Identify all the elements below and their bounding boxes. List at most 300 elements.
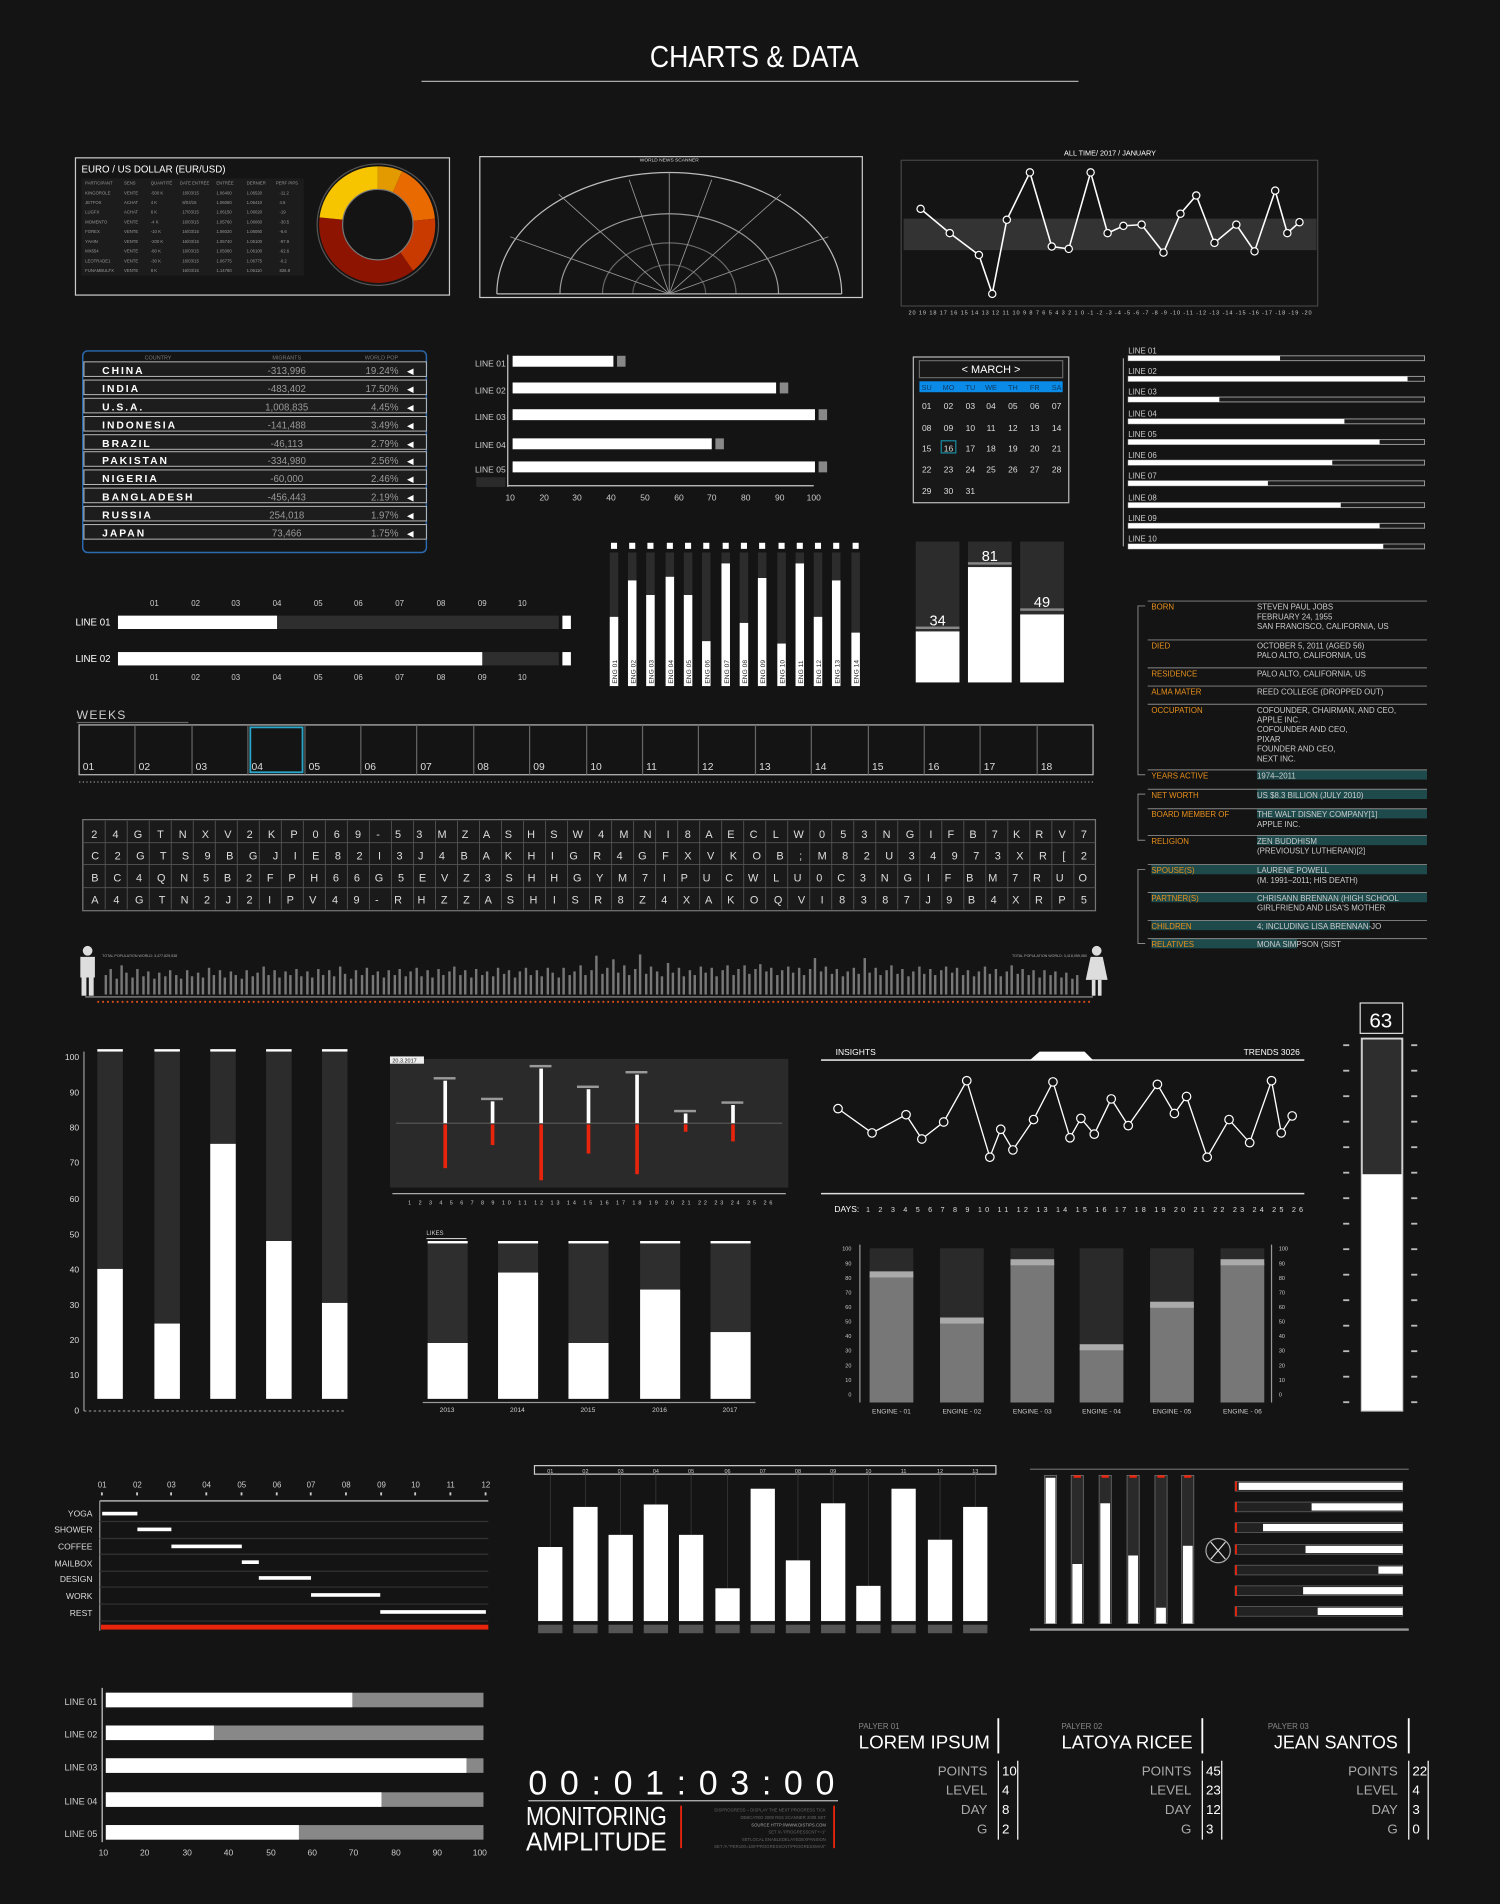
chart: engine bars: 60 [845, 1305, 851, 1311]
panel: player 03: 4 [1412, 1783, 1420, 1798]
panel: biography: BORN [1151, 603, 1174, 612]
chart: engine bars: 50 [1279, 1320, 1285, 1326]
icon: X circle [1206, 1538, 1230, 1563]
chart: line 01-10 progress bars: LINE 04 [1128, 409, 1157, 418]
panel: biography: OCCUPATION [1151, 706, 1203, 715]
chart: positive/negative bars: 20.3.2017 [392, 1058, 417, 1064]
panel: player 03: 0 [1412, 1822, 1420, 1837]
panel: weeks: 09 [533, 762, 545, 773]
chart: line 01-10 progress bars: LINE 06 [1128, 451, 1157, 460]
chart: engine bars: ENGINE - 04 [1082, 1408, 1121, 1415]
chart: engine bars: ENGINE - 06 [1223, 1408, 1262, 1415]
chart: donut [317, 164, 439, 285]
panel: weeks: 02 [139, 762, 150, 773]
panel: biography: OCTOBER 5, 2011 (AGED 56) [1257, 641, 1365, 650]
timer: monitoring amplitude [526, 1765, 838, 1857]
panel: weeks: 12 [702, 762, 714, 773]
chart: daily schedule gantt: 02 [133, 1481, 142, 1490]
calendar: 30 [944, 486, 954, 496]
panel: country migrants table: -483,402 [268, 384, 306, 395]
chart: engine bars: 50 [845, 1320, 851, 1326]
chart: daily schedule gantt [54, 1481, 490, 1631]
chart: engine bars: 100 [842, 1247, 851, 1253]
chart: line 01/02 long bars: 10 [518, 599, 527, 608]
panel: biography: APPLE INC. [1257, 715, 1300, 724]
panel: character grid: B C 4 Q N 5 B 2 F P H 6 6 G 5 E V Z 3 S H H G Y M 7 I P U C W L U 0 C 3 N G I F B M 7 R U O [91, 873, 1087, 885]
panel: weeks: 15 [872, 762, 884, 773]
chart: line 01/02 long bars: 05 [314, 599, 323, 608]
calendar: 05 [1008, 401, 1018, 411]
chart: engine bars: 10 [1279, 1378, 1285, 1384]
calendar: FR [1030, 383, 1040, 392]
chart: daily schedule gantt: REST [70, 1608, 92, 1618]
chart: daily schedule gantt: 05 [237, 1481, 247, 1490]
table: trades: 1.06400 [216, 190, 232, 195]
chart: line 01/02 long bars: 01 [150, 673, 159, 682]
chart: ENG vertical bars: ENG 03 [648, 660, 655, 684]
timer: monitoring amplitude: SET /A "PROGRESSCNT+=1" [768, 1830, 826, 1835]
panel: biography: PIXAR [1257, 735, 1281, 744]
chart: insights line [821, 1047, 1304, 1214]
chart: big vertical bars: 90 [70, 1087, 79, 1097]
panel: weeks [77, 708, 1093, 782]
panel: country migrants table: NIGERIA [102, 474, 159, 485]
panel: biography: ZEN BUDDHISM [1257, 837, 1317, 846]
panel: country migrants table: RUSSIA [102, 511, 153, 522]
chart: engine bars: ENGINE - 03 [1013, 1408, 1052, 1415]
chart: 34 81 49 bars [916, 542, 1064, 682]
chart: positive/negative bars: 1 2 3 4 5 6 7 8 9 10 11 12 13 14 15 16 17 18 19 20 21 22 23 24 25 26 [408, 1201, 772, 1207]
chart: line 01/02 long bars: LINE 02 [75, 654, 111, 665]
calendar: WE [985, 383, 997, 392]
panel: weeks: 01 [83, 762, 94, 773]
table: trades: MX654 [85, 249, 99, 254]
chart: line 01-10 progress bars: LINE 02 [1128, 367, 1157, 376]
calendar: 03 [966, 401, 975, 411]
panel: weeks: 17 [984, 762, 995, 773]
chart: line 01-05 horizontal bars: LINE 05 [475, 464, 506, 474]
chart: insights line: TRENDS 3026 [1244, 1047, 1300, 1057]
timer: monitoring amplitude: MONITORING [526, 1803, 667, 1831]
panel: player 03: DAY [1371, 1802, 1398, 1817]
panel: country migrants table: ◀ [407, 421, 414, 431]
chart: big vertical bars: 50 [70, 1229, 79, 1239]
chart: big vertical bars: 40 [70, 1265, 79, 1275]
calendar: 11 [987, 423, 996, 433]
chart: 13 vertical bars: 05 [688, 1469, 694, 1475]
chart: likes yearly bars: 2014 [510, 1407, 525, 1414]
chart: big vertical bars: 0 [74, 1405, 79, 1415]
chart: line 01/02 long bars: 06 [354, 673, 363, 682]
chart: 13 vertical bars [534, 1466, 996, 1633]
table: trades: 4 K [151, 200, 157, 205]
table: trades: KINGOROLE [85, 190, 111, 195]
table: trades: 1.05740 [216, 239, 232, 244]
table: trades: -62.6 [279, 249, 290, 254]
table: trades: 1.06020 [247, 210, 263, 215]
panel: player 01: 8 [1002, 1802, 1009, 1817]
chart: line 01-05 horizontal bars: LINE 03 [475, 412, 506, 422]
panel: country migrants table: BANGLADESH [102, 492, 194, 503]
chart: big vertical bars: 80 [70, 1123, 79, 1133]
chart: line 01/02 long bars [75, 599, 571, 682]
panel: biography: PALO ALTO, CALIFORNIA, US [1257, 669, 1366, 678]
table: trades: -200 K [151, 239, 163, 244]
chart: ENG vertical bars: ENG 11 [798, 660, 805, 684]
table: trades: -11.2 [279, 190, 289, 195]
table: trades: SENS [124, 181, 136, 186]
chart: big vertical bars: 70 [70, 1158, 79, 1168]
panel: player 02: LEVEL [1150, 1783, 1191, 1798]
chart: line 01/02 long bars: 09 [478, 599, 487, 608]
chart: big vertical bars: 20 [70, 1335, 79, 1345]
chart: likes yearly bars [423, 1231, 755, 1414]
panel: player 03: POINTS [1348, 1763, 1398, 1778]
chart: engine bars: 80 [1279, 1276, 1285, 1282]
panel: country migrants table: 73,466 [272, 529, 302, 540]
chart: engine bars: 30 [1279, 1349, 1285, 1355]
chart: engine bars: ENGINE - 02 [942, 1408, 982, 1415]
table: trades: 1.14780 [216, 268, 232, 273]
table: trades: ENTRÉE [216, 181, 234, 186]
chart: engine bars: 0 [1279, 1392, 1282, 1398]
panel: biography: 1974–2011 [1257, 771, 1296, 780]
chart: line 01-05 bottom bars: 10 [99, 1847, 108, 1857]
table: trades: DATE ENTRÉE [180, 181, 209, 186]
chart: line 01/02 long bars: 02 [191, 599, 200, 608]
table: trades: 17/03/15 [182, 210, 200, 215]
panel: biography: SAN FRANCISCO, CALIFORNIA, US [1257, 622, 1389, 631]
calendar: 25 [986, 464, 996, 474]
chart: ENG vertical bars: ENG 13 [834, 660, 841, 684]
panel: player 02: 23 [1206, 1783, 1221, 1798]
panel: player 01: 4 [1002, 1783, 1010, 1798]
panel: weeks: 16 [928, 762, 940, 773]
chart: daily schedule gantt: 10 [411, 1481, 420, 1490]
panel: country migrants table: 3.49% [371, 421, 399, 432]
panel: player 01: 2 [1002, 1822, 1009, 1837]
panel: weeks: 07 [420, 762, 432, 773]
calendar: TH [1008, 383, 1018, 392]
chart: line 01-05 bottom bars: LINE 05 [64, 1829, 97, 1839]
chart: line 01-05 bottom bars: 100 [473, 1847, 487, 1857]
chart: line 01/02 long bars: LINE 01 [75, 617, 111, 628]
chart: ENG vertical bars: ENG 10 [780, 660, 787, 684]
panel: country migrants table: 2.19% [371, 492, 399, 503]
panel: biography: LAURENE POWELL [1257, 866, 1330, 875]
table: trades: ACHAT [124, 200, 139, 205]
chart: engine bars: 30 [845, 1349, 851, 1355]
panel: country migrants table: ◀ [407, 402, 414, 412]
panel: weeks: 10 [590, 762, 602, 773]
panel: player 02: 12 [1206, 1802, 1221, 1817]
chart: 13 vertical bars: 10 [865, 1469, 871, 1475]
table: trades: 16/03/15 [182, 229, 200, 234]
panel: biography: RELIGION [1151, 837, 1189, 846]
panel: biography: YEARS ACTIVE [1151, 771, 1208, 780]
table: trades: YAHIN [85, 239, 98, 244]
table: trades: 1.06100 [247, 249, 263, 254]
chart: line 01/02 long bars: 10 [518, 673, 527, 682]
calendar: SU [922, 383, 932, 392]
chart: line 01-05 horizontal bars: LINE 01 [475, 359, 506, 369]
chart: engine bars: 20 [1279, 1363, 1285, 1369]
chart: line 01/02 long bars: 05 [314, 673, 323, 682]
table: trades: -500 K [151, 190, 163, 195]
chart: ENG vertical bars: ENG 02 [630, 660, 637, 684]
table: trades: 1.05080 [216, 249, 232, 254]
chart: 34 81 49 bars: 34 [930, 613, 946, 629]
chart: line 01-05 bottom bars: LINE 03 [64, 1762, 97, 1772]
table: trades: PARTICIPANT [85, 181, 113, 186]
panel: biography: SPOUSE(S) [1151, 866, 1195, 875]
panel: player 03 [1268, 1718, 1428, 1840]
chart: daily schedule gantt: 01 [98, 1481, 107, 1490]
chart: line 01-05 bottom bars: LINE 04 [64, 1796, 97, 1806]
panel: country migrants table: -60,000 [270, 474, 304, 485]
panel: country migrants table: JAPAN [102, 529, 146, 540]
panel: country migrants table: WORLD POP [365, 355, 398, 361]
table: trades: 8/03/15 [182, 200, 197, 205]
calendar: 09 [944, 423, 954, 433]
table: trades: VENTE [124, 268, 138, 273]
calendar: 14 [1052, 423, 1062, 433]
chart: engine bars: 20 [845, 1363, 851, 1369]
chart: daily schedule gantt: 08 [342, 1481, 351, 1490]
chart: line 01/02 long bars: 09 [478, 673, 487, 682]
table: trades: FUNAMBULFX [85, 268, 114, 273]
chart: daily schedule gantt: 04 [202, 1481, 212, 1490]
calendar: 13 [1030, 423, 1040, 433]
chart: line 01-10 progress bars: LINE 08 [1128, 493, 1157, 502]
panel: country migrants table: ◀ [407, 456, 414, 466]
chart: line 01/02 long bars: 01 [150, 599, 159, 608]
table: trades: -10 K [151, 229, 161, 234]
chart: line 01-10 progress bars: LINE 05 [1128, 430, 1157, 439]
panel: weeks: 05 [309, 762, 320, 773]
chart: ENG vertical bars: ENG 08 [742, 660, 749, 684]
panel: biography: US $8.3 BILLION (JULY 2010) [1257, 791, 1364, 800]
chart: likes yearly bars: 2013 [440, 1407, 455, 1414]
chart: ENG vertical bars: ENG 14 [854, 660, 861, 684]
chart: ENG vertical bars: ENG 12 [816, 660, 823, 684]
panel: biography: RELATIVES [1151, 940, 1194, 949]
panel: player 01: LOREM IPSUM [859, 1733, 990, 1753]
chart: line 01-05 horizontal bars [475, 355, 827, 502]
panel: biography: REED COLLEGE (DROPPED OUT) [1257, 688, 1384, 697]
panel: country migrants table: 2.46% [371, 474, 399, 485]
chart: engine bars: 90 [845, 1261, 851, 1267]
panel: country migrants table: -456,443 [268, 492, 306, 503]
chart: 13 vertical bars: 12 [937, 1469, 943, 1475]
chart: engine bars: 80 [845, 1276, 851, 1282]
table: trades: 16/03/15 [182, 258, 200, 263]
chart: line 01-05 bottom bars [64, 1688, 487, 1857]
table: trades: 1.06060 [247, 219, 263, 224]
table: trades: MOMENTO [85, 219, 108, 224]
panel: world news scanner [480, 157, 862, 298]
table: trades: VENTE [124, 258, 138, 263]
chart: line 01-05 horizontal bars: 90 [775, 492, 785, 502]
chart: all time line chart [901, 148, 1318, 316]
chart: line 01-05 horizontal bars: 20 [539, 492, 549, 502]
panel: biography: FOUNDER AND CEO, [1257, 745, 1336, 754]
chart: engine bars [842, 1245, 1288, 1415]
panel: player 01: PALYER 01 [859, 1722, 900, 1731]
chart: ENG vertical bars: ENG 06 [704, 660, 711, 684]
panel: weeks: 18 [1041, 762, 1053, 773]
chart: line 01-10 progress bars: LINE 10 [1128, 535, 1157, 544]
chart: line 01-05 horizontal bars: 10 [505, 492, 515, 502]
panel: player 02: G [1181, 1822, 1191, 1837]
panel: country migrants table: 1,008,835 [265, 402, 308, 413]
calendar: 06 [1030, 401, 1040, 411]
table: trades: DERNIER [247, 181, 266, 186]
table: trades: 1.05760 [216, 219, 232, 224]
calendar: 26 [1008, 464, 1018, 474]
panel: country migrants table: ◀ [407, 529, 414, 539]
chart: ENG vertical bars [610, 543, 861, 686]
chart: engine bars: 70 [1279, 1290, 1285, 1296]
chart: ENG vertical bars: ENG 05 [686, 660, 693, 684]
chart: daily schedule gantt: 03 [167, 1481, 176, 1490]
chart: line 01/02 long bars: 07 [395, 599, 404, 608]
calendar: 20 [1030, 444, 1040, 454]
chart: line 01-10 progress bars: LINE 07 [1128, 471, 1157, 480]
panel: player 02: 45 [1206, 1763, 1221, 1778]
chart: line 01/02 long bars: 08 [437, 599, 446, 608]
table: trades: 1.06100 [247, 239, 263, 244]
chart: line 01-05 horizontal bars: 70 [707, 492, 717, 502]
chart: 13 vertical bars: 09 [830, 1469, 836, 1475]
chart: line 01/02 long bars: 06 [354, 599, 363, 608]
table: trades: QUANTITÉ [151, 181, 172, 186]
panel: country migrants table: 2.56% [371, 456, 399, 467]
table: trades: -19 [279, 210, 286, 215]
panel: country migrants table: PAKISTAN [102, 456, 169, 467]
chart: insights line: INSIGHTS [836, 1047, 876, 1057]
chart: line 01-05 horizontal bars: 40 [606, 492, 616, 502]
chart: engine bars: 60 [1279, 1305, 1285, 1311]
panel: player 02 [1061, 1718, 1222, 1840]
panel: country migrants table: -46,113 [271, 439, 303, 450]
calendar: 16 [944, 444, 954, 454]
calendar: 21 [1052, 444, 1062, 454]
calendar: 02 [944, 401, 954, 411]
chart: line 01/02 long bars: 02 [191, 673, 200, 682]
panel: player 03: 3 [1412, 1802, 1420, 1817]
chart: line 01/02 long bars: 07 [395, 673, 404, 682]
panel: biography: CHILDREN [1151, 922, 1192, 931]
chart: likes yearly bars: 2016 [652, 1407, 667, 1414]
table: trades: FOREX [85, 229, 100, 234]
chart: big vertical bars: 10 [70, 1370, 79, 1380]
timer: monitoring amplitude: DEBCATED 2008 RSS SCANNER 2008 SET [740, 1815, 826, 1820]
panel: country migrants table: 1.97% [371, 511, 399, 522]
chart: line 01-05 horizontal bars: LINE 04 [475, 440, 506, 450]
chart: line 01-05 horizontal bars: 60 [674, 492, 684, 502]
table: trades [82, 178, 304, 276]
panel: biography: (M. 1991–2011; HIS DEATH) [1257, 876, 1358, 885]
panel: biography: STEVEN PAUL JOBS [1257, 603, 1333, 612]
table: trades: 16/03/15 [182, 268, 200, 273]
panel: country migrants table: 2.79% [371, 439, 399, 450]
table: trades: -30 K [151, 258, 161, 263]
calendar: 22 [922, 464, 932, 474]
chart: likes yearly bars: 2015 [580, 1407, 596, 1414]
calendar: 27 [1030, 464, 1040, 474]
calendar: 29 [922, 486, 932, 496]
panel: player 01: DAY [961, 1802, 987, 1817]
table: trades: ACHAT [124, 210, 139, 215]
panel: character grid: A 4 G T N 2 J 2 I P V 4 9 - R H Z Z A S H I S R 8 Z 4 X A K O Q V I 8 3 8 7 J 9 B 4 X R P 5 [91, 894, 1087, 906]
panel: biography: APPLE INC. [1257, 820, 1300, 829]
icon: woman [1086, 946, 1108, 996]
chart: line 01-05 bottom bars: 60 [308, 1847, 317, 1857]
table: trades: -0.2 [279, 258, 287, 263]
panel: biography: THE WALT DISNEY COMPANY[1] [1257, 810, 1377, 819]
chart: 13 vertical bars: 07 [760, 1469, 766, 1475]
calendar: 08 [922, 423, 932, 433]
table: trades: 16/03/15 [182, 239, 200, 244]
calendar [913, 357, 1069, 503]
calendar: 19 [1008, 444, 1018, 454]
chart: engine bars: 100 [1279, 1247, 1288, 1253]
chart: line 01/02 long bars: 08 [437, 673, 446, 682]
table: trades: 1.06520 [247, 190, 263, 195]
chart: line 01/02 long bars: 03 [231, 599, 241, 608]
table: trades: -30.5 [279, 219, 290, 224]
chart: ENG vertical bars: ENG 07 [724, 660, 731, 684]
panel: player 01: G [977, 1822, 987, 1837]
chart: 34 81 49 bars: 81 [982, 549, 998, 565]
panel: country migrants table: CHINA [102, 366, 145, 377]
panel: biography: ALMA MATER [1151, 688, 1202, 697]
panel: country migrants table: ◀ [407, 492, 414, 502]
panel: player 02: PALYER 02 [1061, 1722, 1102, 1731]
panel: weeks: 13 [759, 762, 771, 773]
panel: country migrants table: 17.50% [366, 384, 399, 395]
table: trades: VENTE [124, 190, 138, 195]
panel: weeks: WEEKS [77, 708, 127, 722]
chart: 13 vertical bars: 11 [901, 1469, 906, 1475]
calendar: < MARCH > [962, 364, 1020, 376]
panel: biography: PALO ALTO, CALIFORNIA, US [1257, 651, 1366, 660]
chart: big vertical bars [65, 1049, 347, 1415]
panel: biography: RESIDENCE [1151, 669, 1197, 678]
panel: player 02: DAY [1165, 1802, 1191, 1817]
table: trades: 16/03/15 [182, 190, 200, 195]
chart: insights line: DAYS: [834, 1204, 859, 1214]
icon: man [80, 946, 95, 996]
panel: euro us dollar [75, 158, 449, 295]
chart: daily schedule gantt: 12 [482, 1481, 490, 1490]
chart: daily schedule gantt: COFFEE [58, 1541, 93, 1551]
chart: world population skyline [80, 946, 1108, 1002]
chart: 34 81 49 bars: 49 [1034, 595, 1050, 611]
chart: engine bars: ENGINE - 05 [1153, 1408, 1192, 1415]
chart: ENG vertical bars: ENG 04 [668, 660, 675, 684]
chart: world population skyline: TOTAL POPULATION WORLD: 3,418,059,080 [1012, 954, 1087, 958]
panel: country migrants table: 1.75% [371, 529, 399, 540]
chart: all time line chart: ALL TIME/ 2017 / JANUARY [1064, 148, 1156, 157]
chart: ENG vertical bars: ENG 01 [612, 660, 619, 684]
calendar: 23 [944, 464, 954, 474]
panel: biography: (PREVIOUSLY LUTHERAN)[2] [1257, 847, 1365, 856]
panel: character grid: 2 4 G T N X V 2 K P 0 6 9 - 5 3 M Z A S H S W 4 M N I 8 A E C L W 0 5 3 N G I F B 7 K R V 7 [91, 829, 1087, 841]
table: trades: 1.06775 [216, 258, 232, 263]
table: trades: -6.6 [279, 229, 287, 234]
